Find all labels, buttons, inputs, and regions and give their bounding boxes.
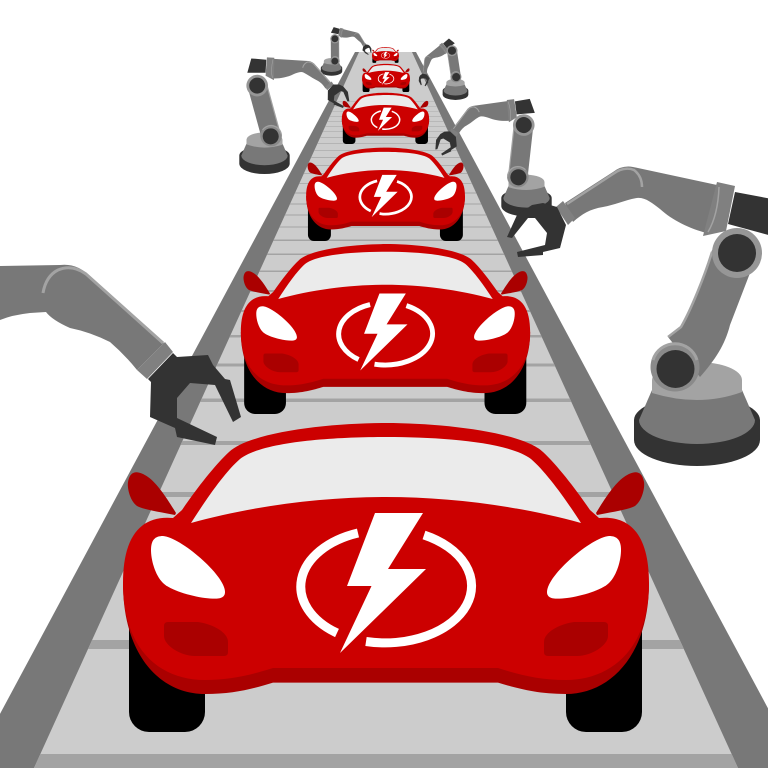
robot arm: mid right [426,87,555,216]
upper arm [487,111,555,191]
robot arm: large right [507,167,768,466]
car 5 [362,64,410,92]
car 4 [342,93,429,144]
robot arm: large left [0,265,241,445]
car 2 [241,244,530,414]
forearm and gripper [329,22,377,56]
car 6 (farthest) [372,47,399,63]
wrist collar [137,342,173,379]
robot arm: top right [410,34,474,100]
base [239,132,290,174]
forearm highlight [43,268,163,343]
upper arm [650,228,762,392]
forearm and gripper [410,34,458,88]
forearm and gripper [507,167,768,257]
base [321,58,342,76]
car 1 (nearest) [123,423,649,732]
robot arm: top left [320,22,377,76]
forearm [0,265,164,370]
base [443,79,468,100]
car 3 [306,148,465,241]
base [634,362,760,466]
forearm and gripper [426,87,538,157]
robot arm: mid left [234,46,357,174]
base [501,175,552,216]
forearm and gripper [245,46,357,109]
upper arm [234,73,294,149]
gripper [148,353,241,445]
upper arm [320,33,350,67]
upper arm [434,43,474,85]
